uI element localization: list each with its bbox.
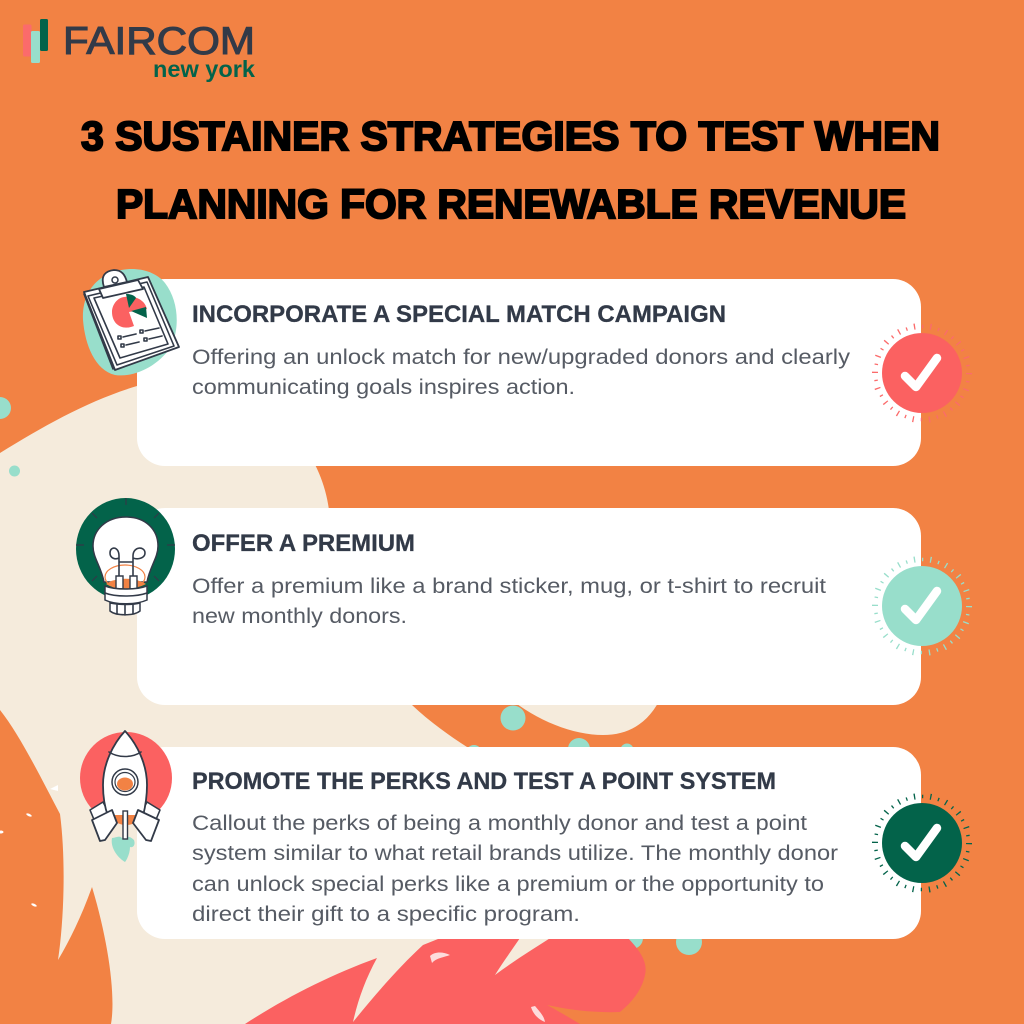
body: premium xyxy=(192,574,826,628)
heading: special match: INCORPORATE A SPECIAL MATCH CAMPAIGN xyxy=(192,301,726,328)
panel: offer a premium xyxy=(137,508,921,705)
icon: mint check badge xyxy=(875,559,969,653)
title: 3 SUSTAINER STRATEGIES TO TEST WHEN xyxy=(81,113,940,159)
cream flame shape xyxy=(0,386,662,1024)
heading: premium: OFFER A PREMIUM xyxy=(192,530,415,557)
icon: light bulb xyxy=(76,498,175,615)
panel: perks and point system xyxy=(137,747,921,939)
title xyxy=(81,113,940,227)
body: premium: new monthly donors. xyxy=(192,604,407,628)
body: perks xyxy=(192,811,838,926)
body: special match: Offering an unlock match for new/upgraded donors and clearly xyxy=(192,345,850,369)
white specks xyxy=(0,785,58,907)
icon: clipboard with pie chart xyxy=(83,269,179,375)
body: perks: direct their gift to a specific program. xyxy=(192,902,580,926)
icon: green check badge xyxy=(875,796,969,890)
icon: coral check badge xyxy=(875,326,969,420)
body: premium: Offer a premium like a brand sticker, mug, or t-shirt to recruit xyxy=(192,574,826,598)
title: PLANNING FOR RENEWABLE REVENUE xyxy=(116,181,906,227)
icon: rocket xyxy=(80,731,172,862)
panel: special match campaign xyxy=(137,279,921,466)
body: perks: can unlock special perks like a premium or the opportunity to xyxy=(192,872,824,896)
logo: FAIRCOM xyxy=(63,20,255,63)
logo xyxy=(23,19,255,82)
mint dots xyxy=(0,397,702,955)
body: perks: system similar to what retail brands utilize. The monthly donor xyxy=(192,841,838,865)
heading: perks: PROMOTE THE PERKS AND TEST A POINT SYSTEM xyxy=(192,768,776,795)
body: special match: communicating goals inspires action. xyxy=(192,375,575,399)
logo: new york xyxy=(153,56,255,82)
body: special match xyxy=(192,345,850,399)
coral flame xyxy=(245,935,646,1024)
body: perks: Callout the perks of being a monthly donor and test a point xyxy=(192,811,807,835)
